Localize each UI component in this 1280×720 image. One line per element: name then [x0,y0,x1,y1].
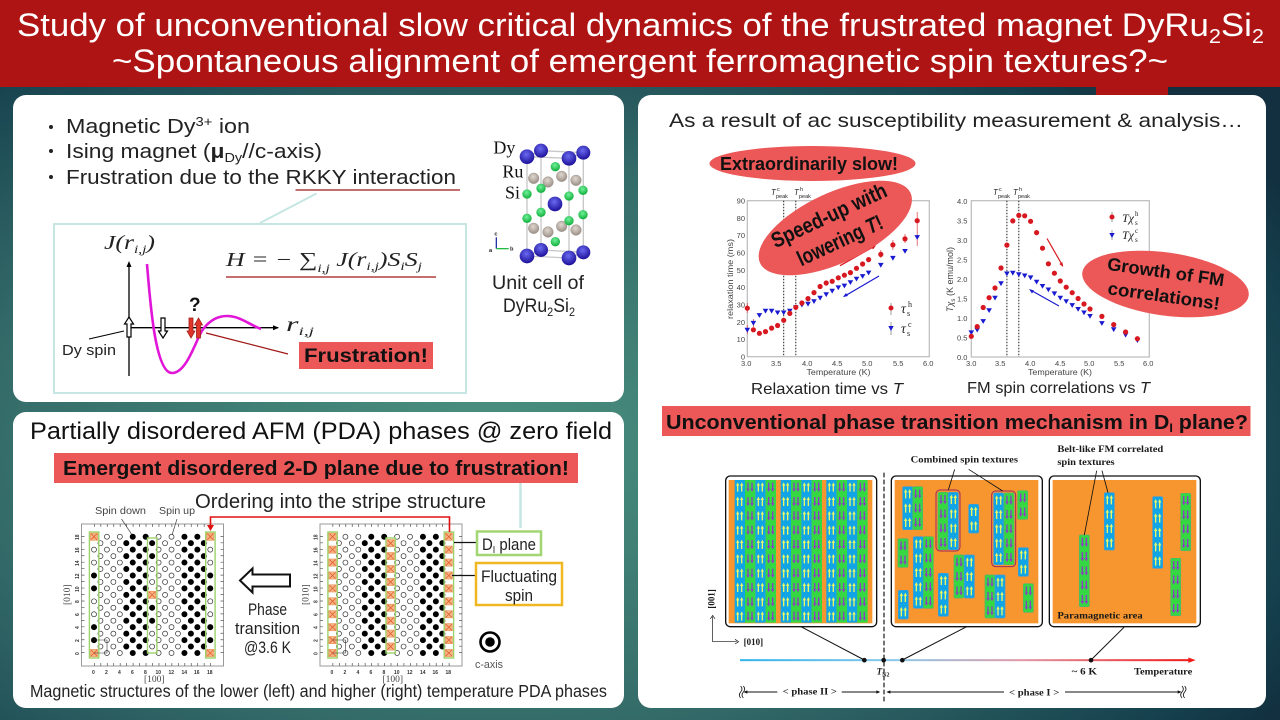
lower temperature lattice: 4 [118,670,121,676]
panel: PDA phases [13,412,624,708]
higher temperature lattice: 4 [314,626,320,629]
callout: extraordinarily slow [710,146,916,181]
crystal unit cell: Si [505,183,520,203]
higher temperature lattice: 6 [370,670,372,676]
higher temperature lattice: 2 [314,639,320,642]
chart: FM correlations: h [1135,210,1139,218]
crystal unit cell: Ru [502,162,523,182]
chart: relaxation time: τ [901,321,907,336]
lower temperature lattice: 16 [194,670,200,676]
chart: relaxation time: 60 [737,248,745,258]
higher temperature lattice: 8 [314,600,320,603]
chart: FM correlations: 3.0 [957,236,967,245]
chart: relaxation time: Temperature (K) [806,367,871,377]
chart: relaxation time: 6.0 [923,359,933,368]
legend: DI plane: I [493,545,495,556]
chart: relaxation time: c [908,320,912,329]
lower temperature lattice: 2 [75,639,81,642]
RKKY graph box: J(r [330,249,367,271]
chart: relaxation time: 3.5 [771,359,781,368]
crystal unit cell: Dy [493,137,515,157]
title banner: 2 [1252,26,1264,48]
RKKY graph box: j [415,259,423,273]
icon: c-axis: c-axis [475,659,503,671]
chart: FM correlations: 4.0 [1025,359,1035,368]
crystal axes [707,589,763,647]
RKKY graph box: i [400,259,405,273]
chart: FM correlations: T [1013,188,1019,197]
chart captions: Relaxation time vs T [751,381,904,398]
RKKY graph box: H = − ∑ [226,249,297,271]
higher temperature lattice: 8 [382,670,386,676]
chart: FM correlations: Tχ [1122,228,1135,242]
temperature axis: T [877,666,882,676]
lower temperature lattice: 0 [92,670,95,676]
chart: relaxation time: h [908,300,912,309]
higher temperature lattice: 12 [314,573,320,579]
chart captions [751,380,1151,398]
chart: relaxation time: 80 [737,214,745,223]
crystal unit cell: DyRu [503,295,552,317]
title banner: Study of unconventional slow critical dynamics of the frustrated magnet DyRu [17,7,1113,43]
bullet list: Frustration due to the RKKY interaction [66,166,456,189]
lower temperature lattice: 4 [75,626,81,629]
chart: FM correlations: 2.5 [957,256,967,264]
crystal unit cell: b [510,247,514,253]
higher temperature lattice: 2 [344,670,346,676]
lower temperature lattice: 12 [168,670,174,676]
crystal unit cell [489,137,590,319]
phase diagram [707,444,1200,702]
texture labels: spin textures [1057,457,1115,467]
callout: extraordinarily slow: Extraordinarily slow! [720,154,898,174]
bullet list: //c-axis) [242,140,322,163]
chart: relaxation time: 70 [737,231,745,240]
higher temperature lattice: 12 [407,670,413,676]
chart: FM correlations: 3.5 [995,359,1005,368]
higher temperature lattice: 0 [330,670,334,676]
legend: DI plane: D [482,535,494,554]
PDA heading: Partially disordered AFM (PDA) phases @ zero field [30,418,612,445]
chart: FM correlations: 2.0 [957,275,967,284]
phase banner [662,406,1250,436]
phase banner: Unconventional phase transition mechanism in D [666,411,1147,434]
spin labels: Spin up [159,505,195,517]
lower temperature lattice: 8 [75,600,81,603]
RKKY graph box: )S [378,249,400,271]
chart: FM correlations: s [1135,236,1138,244]
bullet list: Dy [224,150,243,165]
texture labels: Belt-like FM correlated [1057,444,1163,454]
chart: relaxation time: relaxation time (ms) [725,239,735,319]
RKKY graph box: ) [145,232,155,254]
texture labels: Combined spin textures [911,455,1019,465]
texture labels [911,444,1163,467]
chart: FM correlations: s [950,298,957,302]
callout: growth of FM: Growth of FM [1106,254,1226,290]
callout: growth of FM [1078,241,1253,327]
chart: relaxation time: s [907,329,910,338]
chart: relaxation time: T [771,188,777,197]
chart captions: FM spin correlations vs T [967,380,1151,397]
higher temperature lattice: 6 [314,613,320,616]
RKKY graph box: J(r [104,232,127,254]
chart: relaxation time: T [794,188,800,197]
higher temperature lattice: [010] [302,584,312,605]
chart: FM correlations: 4.0 [957,197,967,206]
lower temperature lattice: [010] [63,584,73,605]
lower temperature lattice: 8 [144,670,147,676]
box: phase II texture [726,476,877,627]
higher temperature lattice: 18 [314,534,320,540]
higher temperature lattice: 16 [314,547,320,553]
higher temperature lattice: [100] [382,675,403,685]
temperature axis: N2 [882,673,889,679]
legend: DI plane: plane [495,535,536,554]
title banner: 2 [1209,26,1221,48]
chart: FM correlations: 5.5 [1114,359,1124,368]
higher temperature lattice [302,524,462,685]
bullet list: 3+ [196,114,212,129]
phase transition arrow: Phase [248,600,287,619]
chart: relaxation time: 30 [737,300,745,310]
RKKY graph box: S [405,249,418,271]
chart: FM correlations: s [1135,219,1138,227]
crystal unit cell: a [489,248,493,254]
caption: Magnetic structures of the lower (left) and higher (right) temperature PDA phases [30,681,607,701]
RKKY graph box: r [286,314,294,336]
lower temperature lattice: 6 [131,670,134,676]
chart: relaxation time: τ [901,301,907,316]
spin labels: Spin down [95,505,146,517]
legend: DI plane [452,532,541,576]
phase transition arrow: @3.6 K [244,638,292,657]
chart: FM correlations: 3.0 [966,359,976,368]
chart: relaxation time: 4.5 [832,359,842,368]
chart: FM correlations: h [1019,187,1022,193]
chart: FM correlations: 1.0 [957,314,967,323]
RKKY graph box: i,j [298,324,315,338]
callout: speed-up: lowering T! [793,210,887,271]
title banner: ~Spontaneous alignment of emergent ferromagnetic spin textures?~ [112,43,1168,79]
higher temperature lattice: 16 [432,670,438,676]
higher temperature lattice: 10 [314,586,320,592]
bullet list: Ising magnet ( μ [66,140,223,163]
higher temperature lattice: 14 [420,670,426,676]
legend: fluctuating spin [476,563,562,605]
chart: relaxation time: peak [799,194,811,200]
chart: relaxation time: h [800,187,803,193]
lower temperature lattice: 18 [75,534,81,540]
higher temperature lattice: 14 [314,560,320,566]
chart: FM correlations: 0.5 [957,334,967,342]
legend: fluctuating spin: Fluctuating [481,568,557,586]
bullet list [49,114,460,190]
chart: relaxation time: 5.0 [862,359,872,368]
ordering label: Ordering into the stripe structure [195,491,486,513]
box: phase I combined textures [891,469,1042,627]
RKKY graph box: i,j [366,259,380,273]
chart: relaxation time: s [907,309,910,318]
chart: relaxation time: 40 [737,283,745,292]
RKKY graph box: ? [189,295,201,316]
RKKY graph box: Dy spin [62,342,116,359]
lower temperature lattice: 12 [75,573,81,579]
chart: FM correlations: 0.0 [957,353,967,362]
chart: FM correlations: 6.0 [1143,359,1153,368]
callout connector [260,194,316,223]
lower temperature lattice: 10 [156,670,161,676]
chart: relaxation time: 90 [737,196,745,206]
higher temperature lattice: 4 [356,670,360,676]
temperature axis [740,473,1196,702]
lower temperature lattice: 14 [75,560,81,566]
phase banner: plane? [1173,411,1248,434]
chart: FM correlations: 3.5 [957,216,967,226]
lower temperature lattice [63,524,224,685]
chart: FM correlations: Temperature (K) [1028,367,1092,377]
chart: relaxation time: 20 [737,318,745,327]
bullet list: Magnetic Dy [66,115,180,138]
chart: relaxation time: 0 [741,352,745,362]
higher temperature lattice: 0 [314,652,320,655]
PDA banner [54,453,578,483]
phase range labels: < phase I > [1009,688,1059,698]
chart: relaxation time: 4.0 [802,359,812,368]
red ordering arrow [207,517,450,532]
RKKY graph box: i,j [134,242,147,256]
chart: FM correlations: Tχ [945,301,956,312]
lower temperature lattice: 2 [105,670,108,676]
lower temperature lattice: 14 [182,670,187,676]
lower temperature lattice: 16 [75,547,81,553]
chart: FM correlations: T [993,188,999,197]
chart: FM correlations: 4.5 [1055,359,1065,368]
chart: FM correlations: peak [1018,194,1030,200]
chart: relaxation time: 50 [737,266,745,275]
chart: FM correlations [945,187,1153,377]
spin labels [95,505,195,535]
title banner: Si [1221,7,1252,43]
crystal unit cell: 2 [569,305,575,319]
crystal axes: [010] [744,637,763,647]
chart: FM correlations: 5.0 [1084,359,1094,368]
PDA banner: Emergent disordered 2-D plane due to frustration! [63,458,569,480]
crystal unit cell: 2 [547,305,554,319]
crystal unit cell: Unit cell of [492,272,585,294]
phase banner: I [1169,421,1173,435]
phase range labels [739,686,1186,698]
icon: c-axis [475,632,503,671]
box: phase I paramagnetic [1049,471,1200,627]
lower temperature lattice: 6 [75,613,81,616]
RKKY graph box: Frustration! [304,346,428,367]
lower temperature lattice: 0 [75,652,81,655]
chart: relaxation time: 10 [737,335,745,344]
higher temperature lattice: 10 [394,670,400,676]
lower temperature lattice: [100] [144,675,165,685]
phase transition arrow: transition [235,619,300,638]
results heading: As a result of ac susceptibility measurement & analysis… [669,110,1243,132]
chart: FM correlations: c [1135,227,1138,235]
chart: FM correlations: (K emu/mol) [945,247,956,299]
crystal unit cell: Si [553,295,569,317]
chart: FM correlations: peak [998,194,1010,200]
temperature axis: ~ 6 K [1072,666,1097,676]
bullet list: ion [212,115,250,138]
callout: speed-up: Speed-up with [767,178,891,253]
panel: measurement results [638,95,1266,708]
title banner [0,0,1280,95]
lower temperature lattice: 10 [75,586,81,592]
phase transition arrow [235,568,300,657]
panel: frustration [13,95,624,402]
temperature axis: Temperature [1134,666,1192,676]
callout: growth of FM: correlations! [1106,278,1221,314]
chart: FM correlations: 1.5 [957,294,967,304]
chart: FM correlations: Tχ [1122,211,1135,225]
phase range labels: < phase II > [783,687,837,697]
callout: speed-up [745,161,925,295]
chart: relaxation time: 5.5 [893,359,903,368]
chart: relaxation time: c [777,187,780,193]
crystal axes: [001] [707,589,717,609]
crystal unit cell: c [494,231,497,237]
higher temperature lattice: 18 [446,670,451,676]
chart: relaxation time: peak [776,194,788,200]
lower temperature lattice: 18 [207,670,213,676]
chart: relaxation time [725,187,933,377]
box: phase I paramagnetic: Paramagnetic area [1057,610,1143,620]
chart: FM correlations: c [999,187,1002,193]
RKKY graph box: i,j [317,261,331,275]
legend: fluctuating spin: spin [505,587,533,605]
RKKY graph box [54,224,466,393]
chart: relaxation time: 3.0 [741,359,751,368]
